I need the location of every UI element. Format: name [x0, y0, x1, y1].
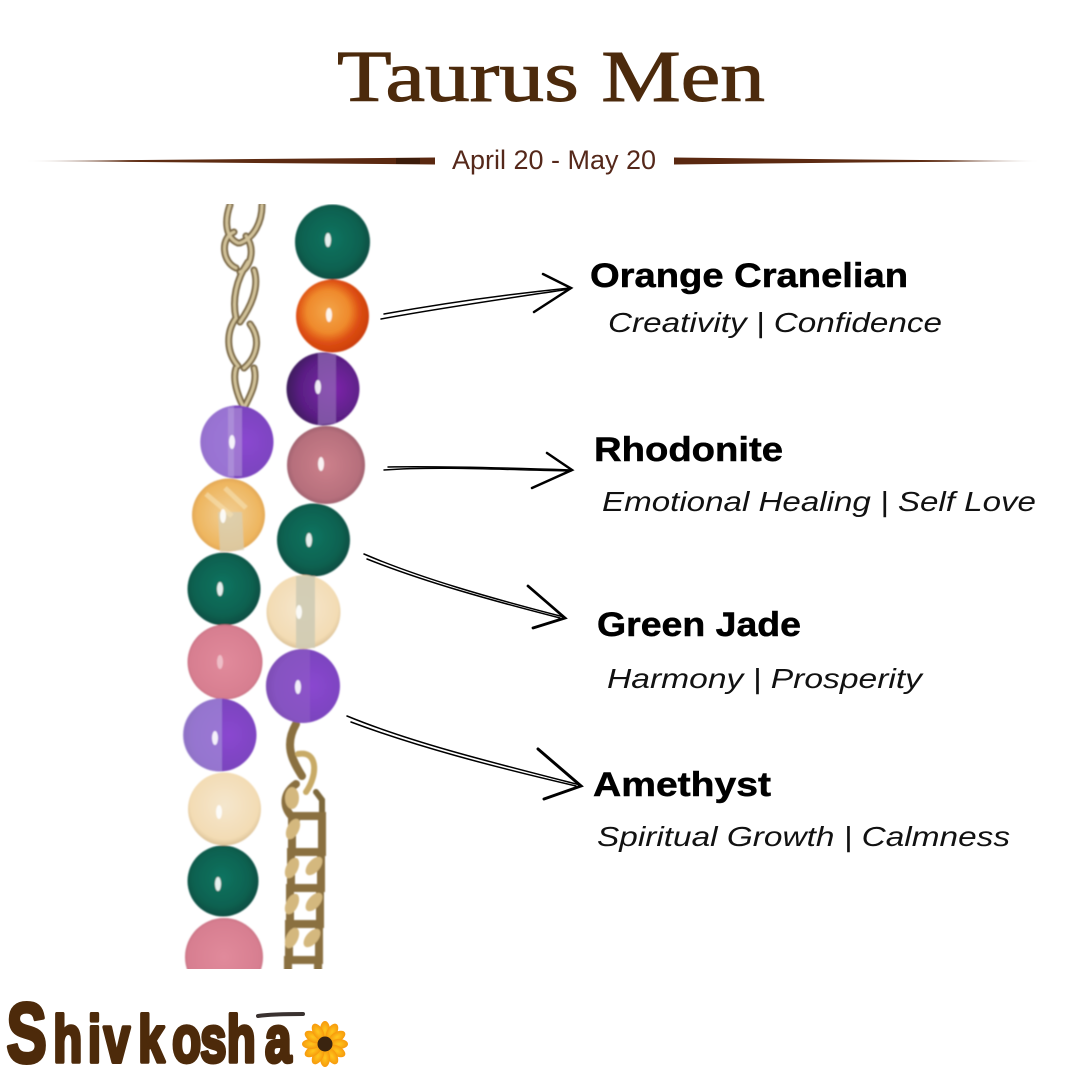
label: rhodonite	[594, 431, 1036, 517]
logo macron	[258, 1014, 303, 1016]
label: orange cranelian: Creativity | Confidence	[608, 307, 942, 338]
label: rhodonite: Emotional Healing | Self Love	[602, 486, 1036, 517]
label: green jade	[597, 606, 924, 694]
date range: April 20 - May 20	[452, 145, 656, 175]
logo: Shivkosha	[6, 986, 292, 1080]
left chain	[224, 205, 262, 406]
label: amethyst	[593, 766, 1010, 852]
label: orange cranelian	[590, 257, 942, 338]
label: orange cranelian: Orange Cranelian	[590, 257, 908, 295]
arrow: amethyst	[347, 716, 581, 799]
arrow: orange cranelian	[381, 274, 571, 319]
label: amethyst: Amethyst	[593, 766, 771, 804]
label: green jade: Green Jade	[597, 606, 801, 644]
arrow: rhodonite	[384, 453, 572, 488]
label: green jade: Harmony | Prosperity	[607, 663, 924, 694]
label: rhodonite: Rhodonite	[594, 431, 783, 469]
bracelet photo	[183, 204, 370, 996]
right strand beads	[266, 204, 370, 723]
right chain	[285, 724, 322, 826]
arrow: green jade	[364, 554, 565, 628]
label: amethyst: Spiritual Growth | Calmness	[597, 821, 1010, 852]
bead highlights	[212, 233, 332, 891]
date divider	[24, 145, 1040, 175]
title: Taurus Men	[337, 36, 765, 117]
icon: sunflower	[302, 1021, 348, 1067]
left strand beads	[183, 406, 274, 996]
